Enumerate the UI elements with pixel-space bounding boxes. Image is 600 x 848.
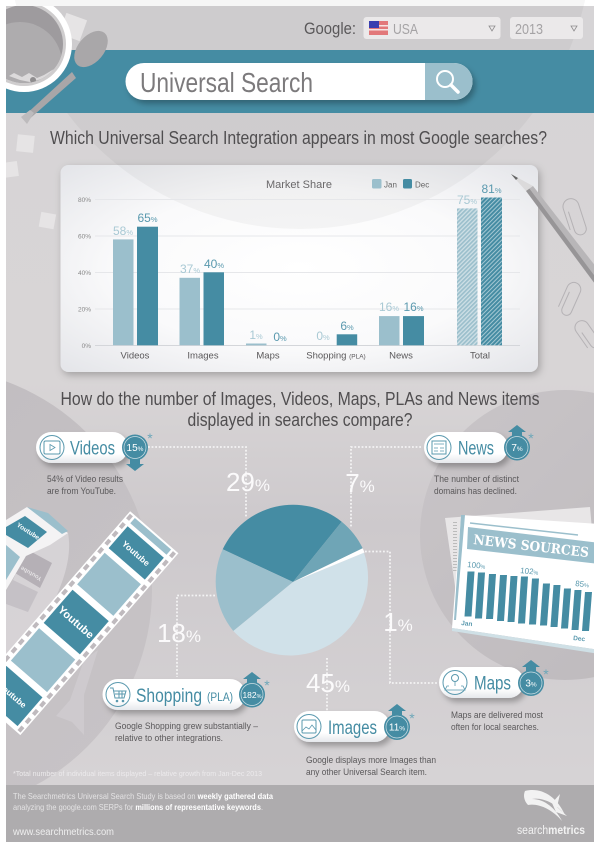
film strips: Youtube [120,539,152,568]
searchmetrics logo [517,790,585,837]
bar chart: market share: Market Share [266,179,332,191]
callout: maps: Maps [474,674,511,694]
heading: which integration: Which Universal Search Integration appears in most Google searches? [50,128,547,148]
dotted leader lines [148,447,438,711]
text: maps note [451,710,544,732]
bar chart: market share: 6% [340,319,354,333]
text: news note [434,474,520,496]
callout: news [424,425,534,463]
callout: shopping: * [264,677,270,693]
bar chart: market share: 40% [204,257,224,271]
heading: how do the number compare: displayed in searches compare? [188,410,412,430]
newspaper: news sources: Jan [461,620,473,628]
pie percentage labels [157,467,413,698]
market share chart card [8,0,592,372]
text: maps note: often for local searches. [451,722,539,732]
bar chart: market share: 0% [316,329,330,343]
footer band: The Searchmetrics Universal Search Study is based on weekly gathered data [13,791,273,801]
callout: shopping [102,672,270,710]
text: images note: any other Universal Search item. [306,767,427,777]
callout: maps: 3% [525,678,537,690]
callout: news: 7% [511,443,523,454]
callout: news: * [528,430,534,446]
heading: how do the number compare: How do the number of Images, Videos, Maps, PLAs and News items [60,389,540,409]
bar chart: market share [78,179,520,362]
callout: videos [36,430,153,471]
bar chart: market share: 16% [403,300,424,314]
search box [126,63,472,100]
text: videos note: 54% of Video results [47,474,124,484]
callout: videos: 15% [127,443,144,454]
text: news note: domains has declined. [434,486,517,496]
coffee cup and spoon [6,6,108,124]
film strips: Youtube [55,604,96,641]
callout: videos: Videos [70,438,115,460]
bar chart: market share: Maps [256,350,280,362]
footnote: *Total number of individual items displayed – relative growth from Jan-Dec 2013 [13,769,262,778]
film strips [0,507,178,735]
bar chart: market share: News [389,350,413,362]
bar chart: market share: 40% [78,270,91,277]
callout: images: 11% [389,722,405,734]
bar chart: market share: 75% [457,193,477,207]
newspaper: news sources [445,507,600,654]
country and year selector: USA [393,21,418,38]
bar chart: market share: Images [187,350,219,362]
callout: maps: * [543,666,549,682]
callout: shopping: (PLA) [207,692,233,704]
text: shopping note: relative to other integrations. [115,733,223,743]
pie percentage labels: 7% [345,468,375,498]
bar chart: market share: 80% [78,197,91,204]
bar chart: market share: Total [470,350,490,362]
bar chart: market share: 65% [137,211,158,225]
bar chart: market share: Videos [121,350,150,362]
pie chart [216,505,368,655]
bar chart: market share: 16% [379,300,399,314]
text: videos note [47,474,124,496]
pie percentage labels: 1% [383,607,413,637]
bar chart: market share: 0% [82,343,91,350]
pie percentage labels: 45% [306,668,350,698]
bar chart: market share: Shopping (PLA) [306,350,366,362]
country and year selector [304,17,583,39]
bar chart: market share: 37% [180,262,200,276]
bar chart: market share: 58% [113,224,133,238]
callout: news: News [458,438,494,460]
callout: images: * [409,710,415,726]
pie percentage labels: 29% [226,467,270,497]
callout: shopping: 182% [242,690,262,700]
text: shopping note [115,721,258,743]
sugar cubes [2,134,56,229]
film strips: Youtube [19,564,43,581]
newspaper: news sources: Dec [573,635,586,643]
pie percentage labels: 18% [157,618,201,648]
country and year selector: Google: [304,19,356,38]
heading: how do the number compare [60,389,540,430]
teal header band [6,50,594,113]
bar chart: market share: 20% [78,306,91,314]
bar chart: market share: Dec [415,180,429,190]
newspaper: news sources: NEWS SOURCES [473,532,590,561]
text: videos note: are from YouTube. [47,486,116,496]
callout: maps [439,660,549,698]
search box: Universal Search [140,67,313,98]
text: shopping note: Google Shopping grew substantially – [115,721,258,731]
bar chart: market share: 0% [273,330,287,344]
paperclips [558,198,594,348]
bar chart: market share: Jan [384,180,397,190]
newspaper: news sources: 100% [467,560,486,571]
film strips: Youtube [15,522,41,542]
callout: images: Images [328,718,377,739]
text: news note: The number of distinct [434,474,520,484]
footer band: www.searchmetrics.com [12,827,114,838]
callout: videos: * [147,430,153,446]
footer band: analyzing the google.com SERPs for millions of representative keywords. [13,802,263,812]
text: images note [306,755,436,777]
bar chart: market share: 81% [481,182,502,196]
searchmetrics logo: searchmetrics [517,825,585,837]
text: images note: Google displays more Images than [306,755,436,765]
bar chart: market share: 60% [78,234,91,240]
country and year selector: 2013 [515,21,543,38]
pencil [511,174,600,284]
footer band [6,785,594,842]
newspaper: news sources: 102% [520,566,539,577]
newspaper: news sources: 85% [575,579,590,589]
text: maps note: Maps are delivered most [451,710,544,720]
callout: images [294,704,415,742]
callout: shopping: Shopping [136,686,202,707]
bar chart: market share: 1% [249,328,263,342]
